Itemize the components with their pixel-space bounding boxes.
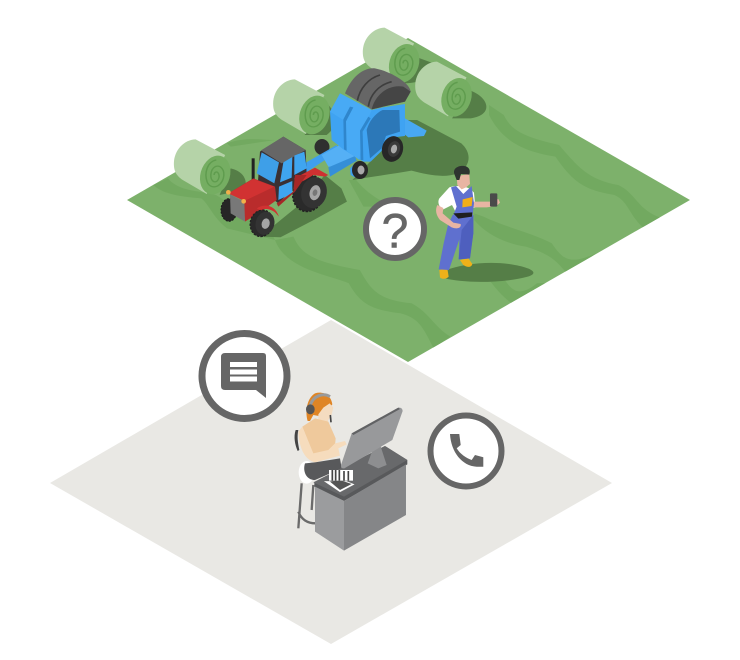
icon: chat bubble	[202, 334, 287, 418]
icon: phone	[430, 416, 502, 486]
tractor rear wheel	[289, 172, 330, 215]
hay bales	[174, 28, 476, 197]
farmer head	[454, 166, 470, 189]
red tractor	[221, 137, 330, 239]
farmer boots	[439, 258, 472, 279]
baler near wheel front	[352, 161, 368, 179]
shadows on the field	[220, 57, 533, 282]
operator torso	[298, 418, 347, 480]
stool	[295, 430, 316, 528]
panel: grey office floor	[50, 320, 612, 644]
farmer with phone	[436, 166, 500, 279]
baler drawbar	[300, 68, 427, 177]
baler near wheel right	[379, 134, 406, 164]
icon: question mark bubble	[366, 200, 424, 258]
baler body	[330, 93, 405, 162]
panel: green field	[127, 38, 690, 362]
tractor exhaust	[252, 158, 255, 180]
tractor red bonnet and fenders	[221, 168, 328, 222]
farmer shirt and arms	[436, 186, 500, 228]
call-centre operator at desk	[295, 393, 407, 551]
monitor	[341, 408, 403, 468]
baler dark drum	[345, 68, 411, 109]
tractor front wheel	[247, 206, 279, 239]
desk	[313, 446, 407, 551]
paperwork	[323, 470, 355, 492]
operator hair and headset	[306, 393, 333, 422]
tractor cabin	[257, 137, 307, 203]
farmer overalls	[439, 215, 473, 270]
icon: baler far wheel	[314, 139, 330, 155]
farmer phone	[490, 193, 497, 207]
icon: question mark bubble: ?	[382, 206, 408, 258]
blue round baler	[300, 68, 427, 179]
